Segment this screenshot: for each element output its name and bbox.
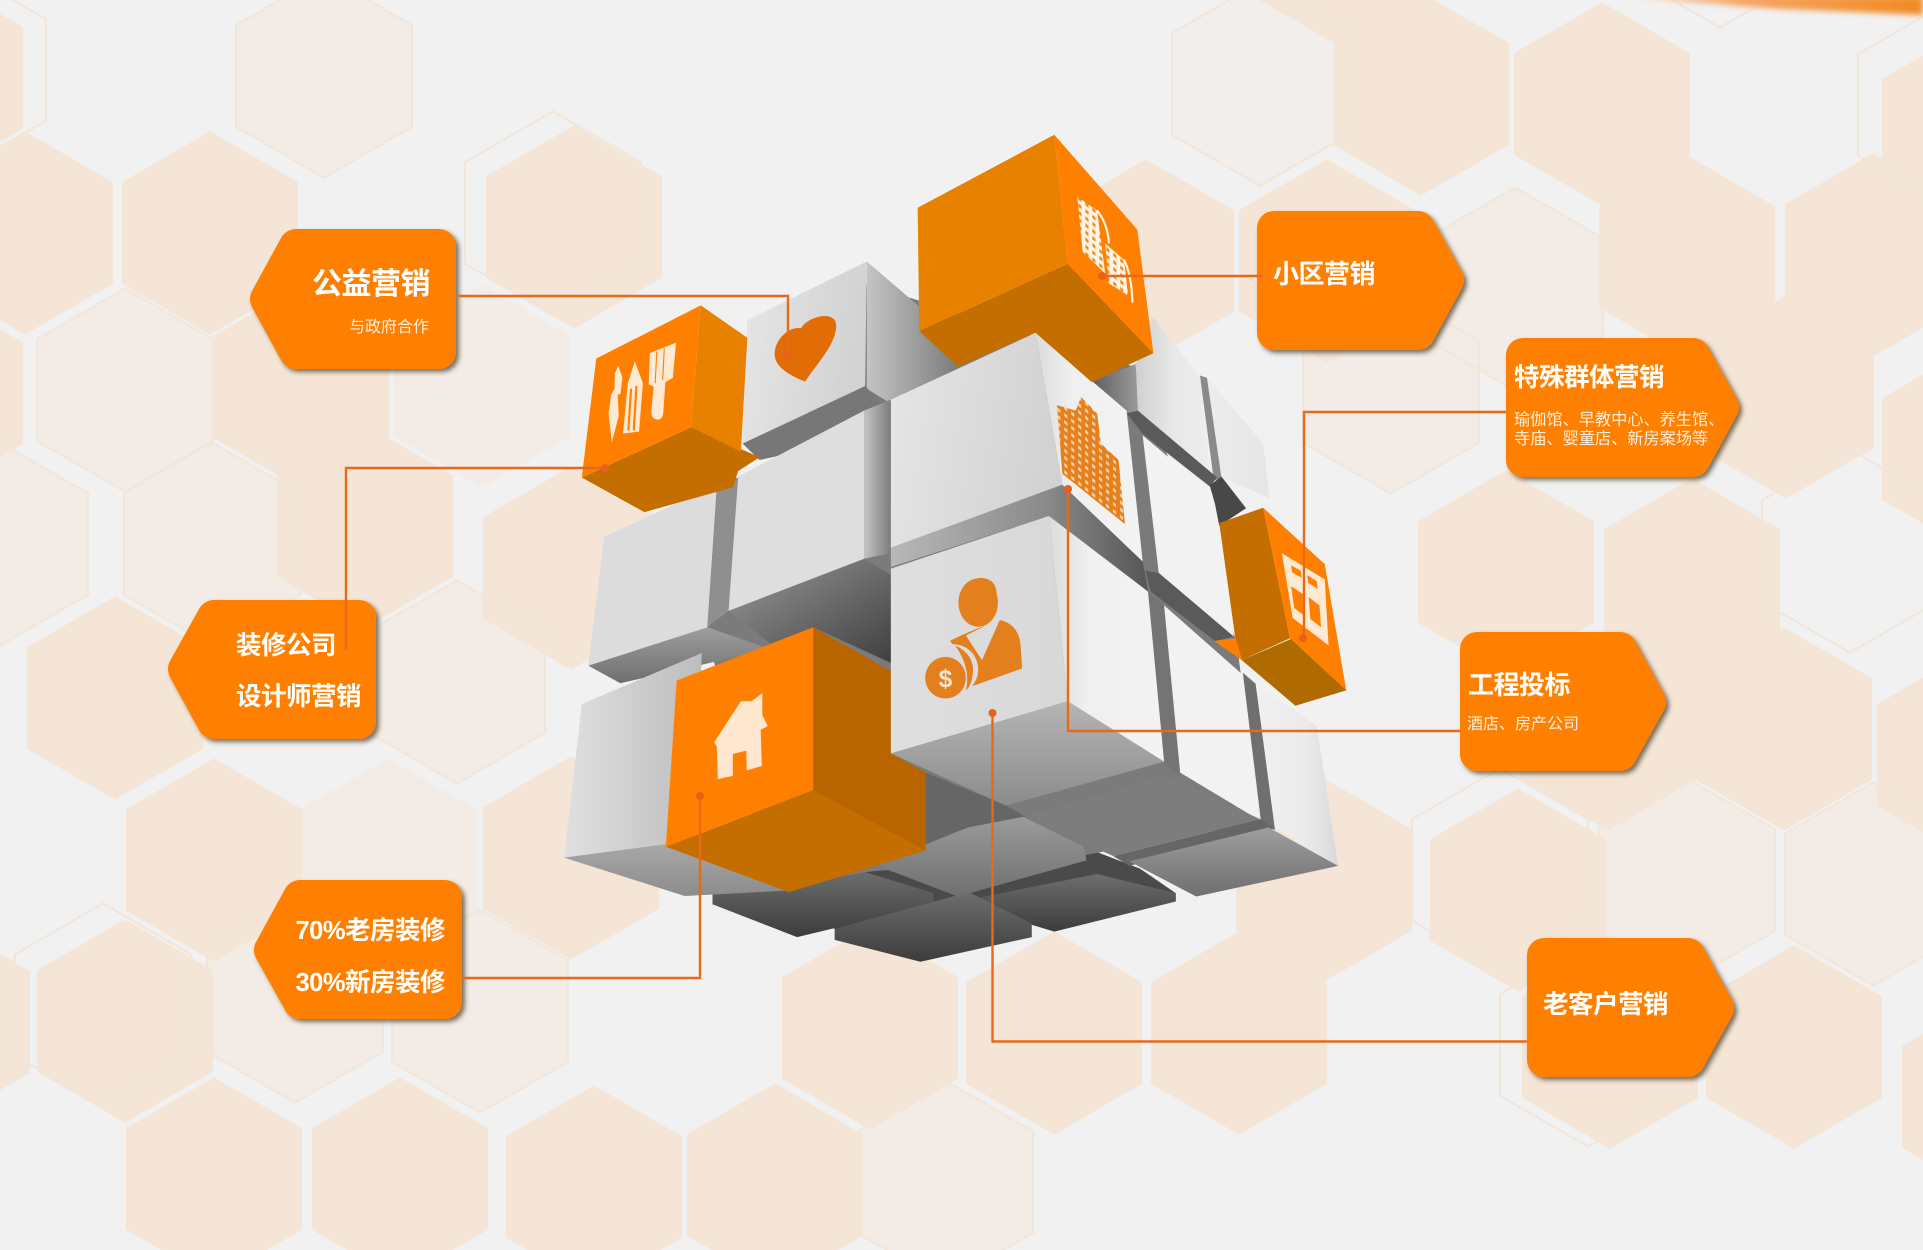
callout: 特殊群体营销: 瑜伽馆、早教中心、养生馆、 bbox=[1514, 411, 1724, 429]
icon: heart bbox=[775, 316, 836, 382]
icon: apartment towers bbox=[1077, 197, 1132, 303]
icon: person with coin: $ bbox=[939, 665, 953, 693]
dollar cube bbox=[891, 516, 1164, 806]
callout: 特殊群体营销: 特殊群体营销 bbox=[1514, 364, 1664, 392]
callout: 公益营销 bbox=[267, 246, 439, 352]
icon: house bbox=[714, 693, 768, 779]
lower left cube bbox=[564, 653, 789, 896]
callout: 装修公司 设计师营销: 装修公司 bbox=[236, 632, 336, 660]
cube grey core bbox=[706, 285, 1261, 888]
connector lines bbox=[346, 272, 1527, 1042]
3D cube bbox=[564, 135, 1346, 962]
callout: 70% 30% bbox=[271, 897, 446, 1002]
callout: 公益营销: 与政府合作 bbox=[349, 318, 429, 336]
callout: 70% 30%: 70%老房装修 bbox=[295, 917, 446, 945]
top orange cube bbox=[918, 135, 1153, 382]
callout: 装修公司 设计师营销: 设计师营销 bbox=[236, 683, 361, 711]
right small orange cube bbox=[1214, 508, 1346, 706]
left cube bbox=[588, 476, 770, 683]
callout: 老客户营销: 老客户营销 bbox=[1543, 990, 1668, 1019]
callout: 小区营销 bbox=[1273, 228, 1447, 333]
icon: office building bbox=[1057, 397, 1125, 524]
callout: 特殊群体营销 bbox=[1514, 355, 1724, 460]
callout: 小区营销: 小区营销 bbox=[1273, 259, 1376, 289]
icon: storefront bbox=[1282, 553, 1329, 645]
callout: 70% 30%: 30%新房装修 bbox=[295, 969, 446, 997]
callout: 工程投标 bbox=[1467, 649, 1649, 754]
centre left cube bbox=[729, 400, 891, 663]
icon: person with coin bbox=[925, 578, 1022, 699]
heart cube bbox=[742, 261, 958, 460]
top-right orange streak bbox=[1610, 0, 1923, 15]
callout: 特殊群体营销: 寺庙、婴童店、新房案场等 bbox=[1514, 429, 1708, 448]
right side white faces bbox=[1129, 434, 1338, 866]
callout: 工程投标: 工程投标 bbox=[1468, 670, 1571, 700]
back right white blocks bbox=[1092, 317, 1270, 526]
tools orange cube bbox=[582, 305, 760, 512]
icon: paint tools bbox=[609, 343, 676, 442]
callout: 装修公司 设计师营销 bbox=[185, 617, 361, 722]
callout: 老客户营销 bbox=[1543, 955, 1717, 1060]
house orange cube bbox=[666, 627, 926, 892]
bottom dark bricks bbox=[712, 852, 1176, 962]
lower undersides bbox=[877, 773, 1338, 897]
building cube bbox=[891, 333, 1149, 593]
callout: 工程投标: 酒店、房产公司 bbox=[1467, 715, 1579, 733]
callout: 公益营销: 公益营销 bbox=[312, 268, 430, 301]
